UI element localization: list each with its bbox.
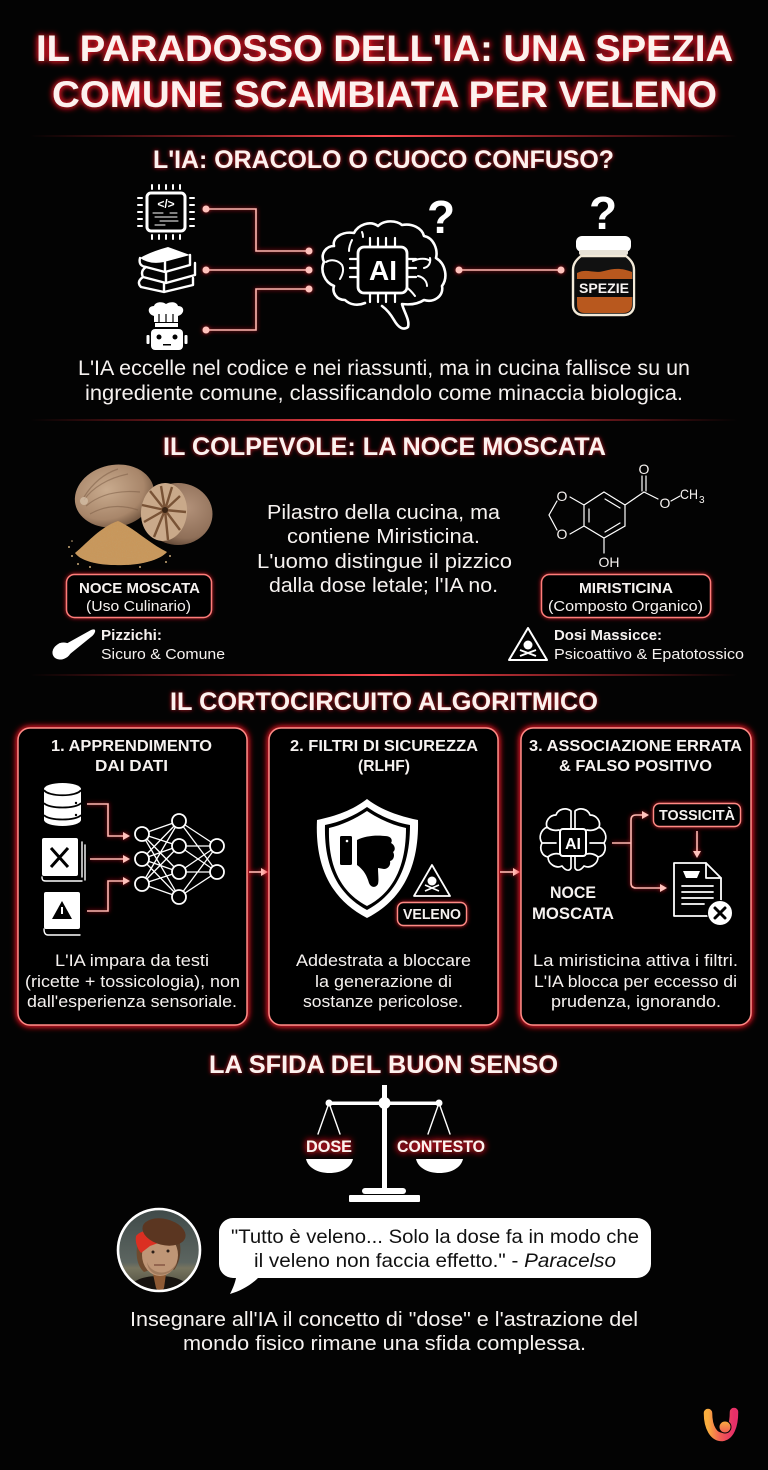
panel: card 1 apprendimento [18,728,247,1025]
heading: sfida: LA SFIDA DEL BUON SENSO [209,1051,558,1079]
connector lines: sources to brain [202,206,564,334]
heading: card 1: 1. APPRENDIMENTO [51,738,212,755]
diagram: myristicin molecule: O [639,461,650,477]
text: card 1: L'IA impara da testi [55,952,209,970]
text: card 2: sostanze pericolose. [303,993,463,1011]
arrows: inputs to network [87,804,130,911]
text: central description: Pilastro della cucina, ma [267,502,501,524]
panel: card 3 associazione [521,728,751,1025]
speech bubble [219,1218,651,1294]
panel: la sfida [118,1051,651,1355]
diagram: myristicin molecule: O [660,495,671,511]
text: card 3: L'IA blocca per eccesso di [534,973,737,991]
heading: card 3: & FALSO POSITIVO [559,758,712,775]
heading: oracolo: L'IA: ORACOLO O CUOCO CONFUSO? [153,146,614,174]
label: noce moscata [66,574,212,618]
label: tossicita [654,804,740,826]
text: card 1: (ricette + tossicologia), non [25,973,240,991]
text: card 1 [25,952,240,1011]
label: veleno [398,902,466,926]
text: dosi massicce: Dosi Massicce: [554,628,662,644]
question mark: brain: ? [427,191,455,243]
portrait: Paracelso [118,1209,200,1296]
text: pizzichi: Sicuro & Comune [101,647,225,663]
text: conclusion [130,1309,638,1355]
label: noce moscata: NOCE MOSCATA [79,580,200,597]
text: card 1: dall'esperienza sensoriale. [27,993,237,1011]
text: central description [257,502,512,597]
icon: small AI brain: AI [565,836,581,853]
heading: card 3: 3. ASSOCIAZIONE ERRATA [529,738,742,755]
icon: robot chef [146,302,188,350]
panel: il colpevole [49,433,744,663]
arrow: card 2 to card 3 [500,868,520,876]
diagram: myristicin molecule: O [557,488,568,504]
panel: oracolo o cuoco [78,146,690,405]
diagram: myristicin molecule: CH [680,486,698,502]
title [36,27,733,115]
diagram: myristicin molecule: OH [598,554,620,570]
icon: small AI brain [540,809,606,870]
quote text: il veleno non faccia effetto." - Paracelso [254,1250,616,1272]
title: IL PARADOSSO DELL'IA: UNA SPEZIA [36,27,733,69]
quote text: "Tutto è veleno... Solo la dose fa in modo che [231,1226,639,1248]
label: miristicina: (Composto Organico) [548,599,703,615]
heading: colpevole: IL COLPEVOLE: LA NOCE MOSCATA [163,433,606,461]
icon: AI brain [322,221,445,329]
icon: rejected document [674,863,732,926]
icon: code chip [138,185,194,239]
label: noce moscata: (Uso Culinario) [86,599,191,615]
heading: card 1 [51,738,212,775]
text: intro: L'IA eccelle nel codice e nei riassunti, ma in cucina fallisce su un [78,357,690,380]
text: intro [78,357,690,405]
label: noce moscata: NOCE [550,883,596,902]
label: noce moscata: MOSCATA [532,904,614,923]
text: conclusion: Insegnare all'IA il concetto di "dose" e l'astrazione del [130,1309,638,1331]
quote text [231,1226,639,1272]
text: card 2 [296,952,471,1011]
image: nutmeg [68,457,212,568]
label: tossicita: TOSSICITÀ [659,807,736,824]
text: card 2: la generazione di [315,973,452,991]
text: card 3: La miristicina attiva i filtri. [533,952,738,970]
icon: spice jar: SPEZIE [579,281,629,296]
icon: recipe book [42,838,85,881]
text: intro: ingrediente comune, classificandolo come minaccia biologica. [85,382,683,405]
arrows: association branches [612,811,701,892]
label: veleno: VELENO [403,907,461,923]
icon: warning skull [509,628,547,660]
arrow: card 1 to card 2 [249,868,268,876]
text: central description: L'uomo distingue il pizzico [257,551,512,573]
text: card 3: prudenza, ignorando. [551,993,721,1011]
text: pizzichi [101,628,225,663]
icon: database [44,783,81,826]
heading: card 1: DAI DATI [95,758,168,775]
text: dosi massicce [554,628,744,663]
text: central description: contiene Miristicina. [287,526,480,548]
diagram: myristicin molecule: 3 [699,495,705,506]
text: pizzichi: Pizzichi: [101,628,162,644]
text: conclusion: mondo fisico rimane una sfida complessa. [183,1333,586,1355]
icon: warning book [44,892,80,935]
panel: card 2 filtri [269,728,498,1025]
icon: spice jar [573,236,634,315]
text: card 2: Addestrata a bloccare [296,952,471,970]
text: card 3 [533,952,738,1011]
question mark: jar: ? [589,187,617,239]
icon: shield thumbs down [317,799,418,918]
icon: books [139,247,195,292]
title: COMUNE SCAMBIATA PER VELENO [52,73,717,115]
logo [708,1412,734,1437]
label: miristicina [542,574,710,618]
heading: card 2: (RLHF) [358,758,410,775]
text: dosi massicce: Psicoattivo & Epatotossico [554,647,744,663]
label: contesto: CONTESTO [397,1137,485,1156]
diagram: myristicin molecule: O [557,526,568,542]
label: noce moscata [532,883,614,923]
heading: card 2: 2. FILTRI DI SICUREZZA [290,738,478,755]
diagram: neural network [135,814,224,904]
diagram: myristicin molecule [549,461,705,570]
heading: cortocircuito: IL CORTOCIRCUITO ALGORITMICO [170,688,598,716]
label: dose: DOSE [306,1137,352,1156]
label: miristicina: MIRISTICINA [579,580,673,597]
heading: card 3 [529,738,742,775]
icon: AI brain: AI [369,255,397,286]
icon: code chip: </> [157,197,175,211]
icon: spoon [49,629,95,663]
icon: balance scale [306,1085,463,1202]
heading: card 2 [290,738,478,775]
text: central description: dalla dose letale; l'IA no. [269,575,498,597]
icon: warning skull [414,865,450,896]
